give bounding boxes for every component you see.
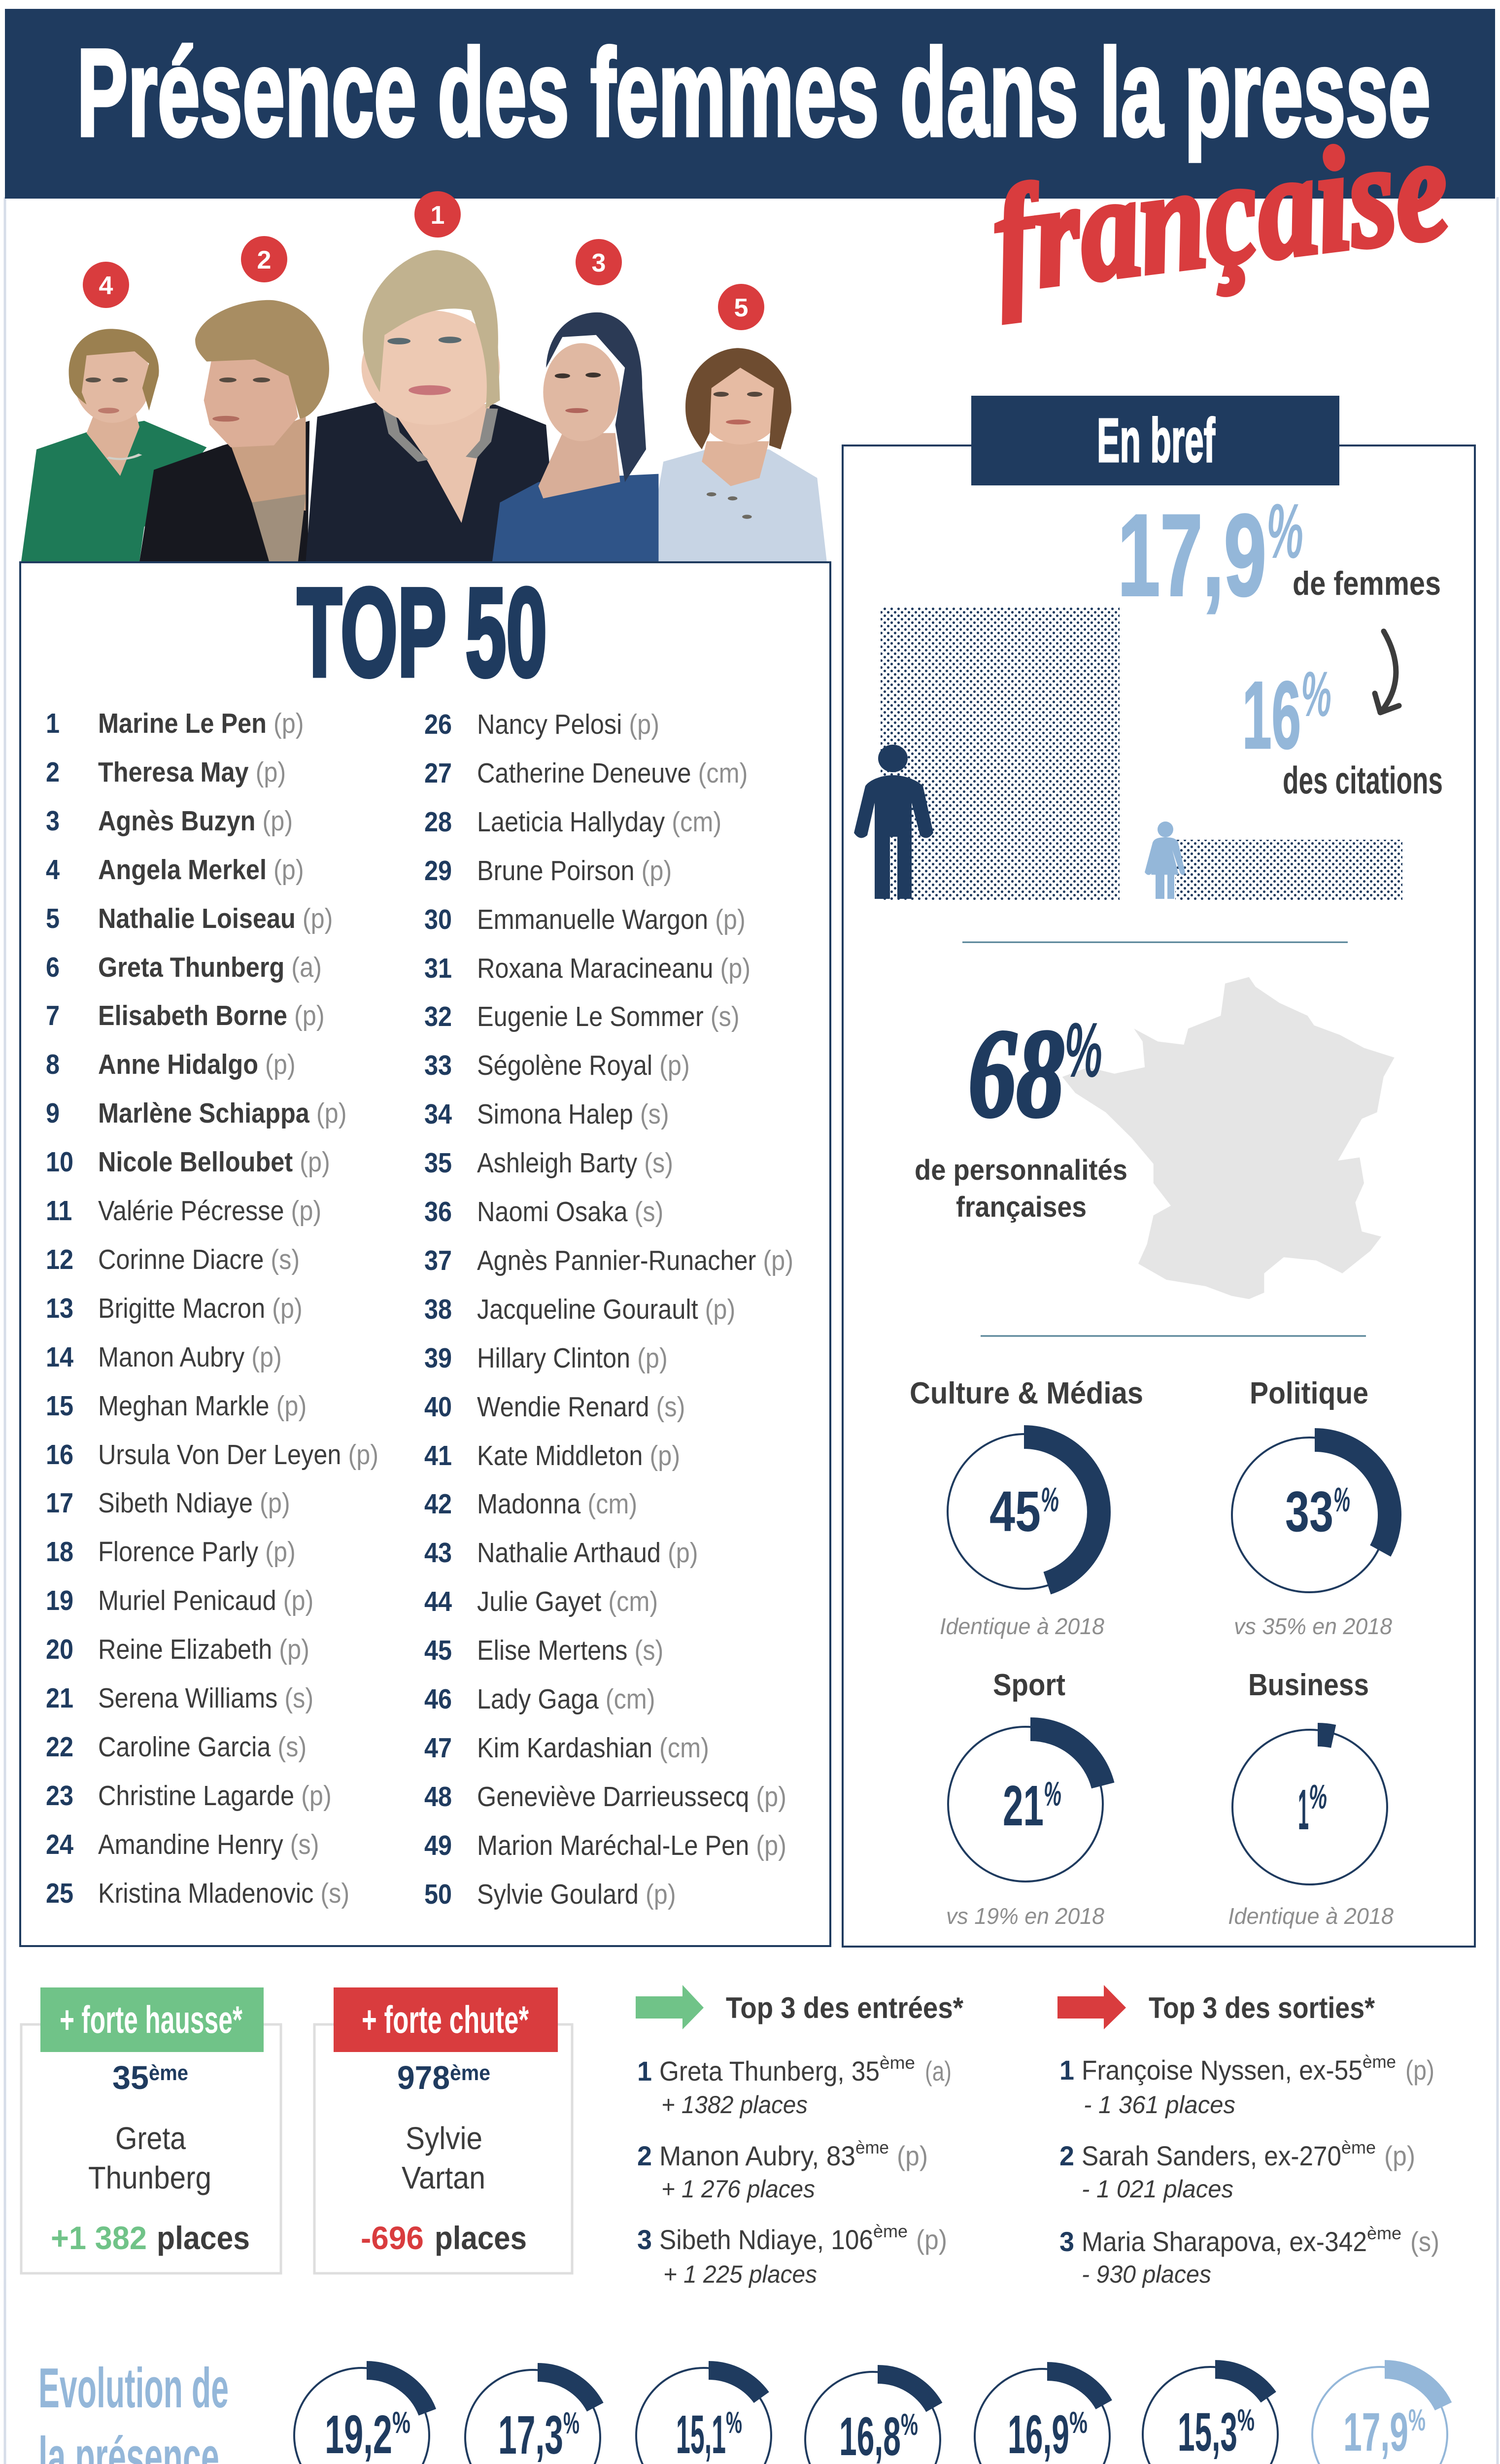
donut: politique 33% — [1232, 1376, 1392, 1639]
donut: sport 21% — [946, 1668, 1105, 1929]
row 24: 24 — [46, 1829, 73, 1860]
row 15: 15 — [46, 1390, 73, 1422]
donut: 2019: % — [1408, 2403, 1426, 2437]
list: top 3 des sorties — [1057, 1985, 1439, 2288]
donut: 2013: 19,2 — [325, 2404, 392, 2464]
stat: 17,9% of women: % — [1266, 488, 1303, 575]
row 35: 35 — [424, 1147, 452, 1179]
row 30: Emmanuelle Wargon (p) — [477, 904, 746, 935]
donut: business 1% — [1228, 1668, 1394, 1929]
row 46: 46 — [424, 1683, 452, 1715]
row 3: Agnès Buzyn (p) — [98, 805, 293, 837]
heading: evolution — [38, 2357, 229, 2464]
row 34: 34 — [424, 1098, 452, 1130]
donut: sport 21%: vs 19% en 2018 — [946, 1903, 1104, 1929]
donut: 2014 — [465, 2370, 603, 2464]
row 21: Serena Williams (s) — [98, 1682, 313, 1714]
row 28: Laeticia Hallyday (cm) — [477, 806, 721, 838]
row 44: Julie Gayet (cm) — [477, 1586, 658, 1617]
card: forte hausse: +1 382 — [51, 2220, 147, 2256]
panel: top 50 — [20, 562, 830, 1946]
card: forte chute: Sylvie — [406, 2121, 482, 2156]
row 27: Catherine Deneuve (cm) — [477, 757, 748, 789]
stat: 16% of quotes: 16 — [1242, 662, 1301, 769]
list: top 3 des sorties: (s) — [1410, 2226, 1439, 2257]
list: top 3 des entrées: 2 — [637, 2140, 652, 2171]
list: top 3 des entrées: + 1382 places — [661, 2091, 808, 2119]
row 32: 32 — [424, 1001, 452, 1032]
donut: 2017: 16,9 — [1008, 2404, 1069, 2464]
list: top 3 des entrées: ème — [873, 2221, 908, 2241]
row 50: 50 — [424, 1879, 452, 1910]
row 7: Elisabeth Borne (p) — [98, 1000, 325, 1031]
list: top 3 des sorties: Maria Sharapova, ex-342 — [1082, 2226, 1367, 2257]
donut: business 1%: Business — [1248, 1668, 1369, 1702]
card: forte chute: 978 — [397, 2059, 450, 2096]
card: forte hausse — [21, 1987, 281, 2273]
row 47: Kim Kardashian (cm) — [477, 1732, 709, 1764]
card: forte hausse: Thunberg — [88, 2160, 211, 2195]
row 49: 49 — [424, 1830, 452, 1861]
arrow: green — [636, 1985, 704, 2029]
donut: culture et médias 45%: 45 — [989, 1479, 1041, 1543]
donut: 2015: % — [726, 2406, 742, 2440]
row 42: Madonna (cm) — [477, 1488, 637, 1520]
row 46: Lady Gaga (cm) — [477, 1683, 655, 1715]
row 17: 17 — [46, 1487, 73, 1519]
row 18: Florence Parly (p) — [98, 1536, 296, 1568]
donut: 2013 — [294, 2368, 432, 2464]
list: top 3 des sorties: Françoise Nyssen, ex-55 — [1082, 2054, 1363, 2086]
list: top 3 des sorties: 1 — [1059, 2054, 1074, 2086]
row 33: Ségolène Royal (p) — [477, 1050, 690, 1081]
card: forte hausse: + forte hausse* — [60, 1998, 242, 2041]
row 37: Agnès Pannier-Runacher (p) — [477, 1245, 793, 1276]
list: top 3 des entrées: ème — [855, 2137, 889, 2157]
donut: culture et médias 45%: % — [1041, 1480, 1059, 1519]
stat: 68% French personalities: 68 — [968, 1004, 1064, 1143]
row 15: Meghan Markle (p) — [98, 1390, 307, 1422]
row 4: Angela Merkel (p) — [98, 854, 304, 886]
donut: culture et médias 45% — [910, 1376, 1143, 1639]
list: top 3 des sorties: ème — [1341, 2137, 1376, 2157]
portraits of the top five — [21, 250, 827, 562]
row 34: Simona Halep (s) — [477, 1098, 669, 1130]
list: top 3 des entrées: Greta Thunberg, 35 — [659, 2055, 880, 2087]
row 41: 41 — [424, 1440, 452, 1472]
card: forte hausse: ème — [149, 2061, 188, 2085]
list: top 3 des sorties: (p) — [1405, 2054, 1434, 2086]
row 29: Brune Poirson (p) — [477, 855, 672, 887]
portrait: Angela Merkel — [21, 329, 206, 562]
stat: 16% of quotes — [1242, 658, 1443, 802]
row 31: Roxana Maracineanu (p) — [477, 953, 750, 984]
rank badge 2 — [241, 236, 287, 282]
row 43: Nathalie Arthaud (p) — [477, 1537, 698, 1569]
donut: 2013: % — [392, 2406, 410, 2440]
row 37: 37 — [424, 1245, 452, 1276]
row 25: 25 — [46, 1878, 73, 1909]
card: forte chute: + forte chute* — [362, 1998, 529, 2041]
row 24: Amandine Henry (s) — [98, 1829, 319, 1860]
row 13: 13 — [46, 1293, 73, 1324]
list: top 3 des entrées: Sibeth Ndiaye, 106 — [659, 2224, 873, 2255]
row 8: Anne Hidalgo (p) — [98, 1049, 296, 1080]
row 23: Christine Lagarde (p) — [98, 1780, 332, 1812]
row 38: 38 — [424, 1294, 452, 1325]
card: forte chute: Vartan — [402, 2160, 485, 2195]
donut: sport 21%: Sport — [993, 1668, 1065, 1702]
row 28: 28 — [424, 806, 452, 838]
donut: culture et médias 45%: Identique à 2018 — [940, 1613, 1104, 1639]
rank badge 4: 4 — [99, 272, 113, 300]
row 23: 23 — [46, 1780, 73, 1812]
donut: business 1%: % — [1309, 1778, 1327, 1816]
list: top 3 des sorties: - 1 021 places — [1082, 2175, 1233, 2203]
stat: 16% of quotes: % — [1301, 658, 1331, 730]
list: top 3 des sorties: - 1 361 places — [1084, 2091, 1235, 2119]
dotted bar: women — [1175, 840, 1402, 900]
donut: culture et médias 45%: Culture & Médias — [910, 1376, 1143, 1410]
row 4: 4 — [46, 854, 60, 886]
rank badge 3: 3 — [592, 249, 606, 277]
row 6: Greta Thunberg (a) — [98, 952, 322, 983]
row 49: Marion Maréchal-Le Pen (p) — [477, 1830, 786, 1861]
stat: 68% French personalities — [915, 1004, 1127, 1223]
list: top 3 des entrées: Manon Aubry, 83 — [659, 2140, 855, 2171]
donut: 2017 — [975, 2369, 1112, 2464]
row 3: 3 — [46, 805, 60, 837]
rank badge 5: 5 — [734, 294, 748, 322]
row 32: Eugenie Le Sommer (s) — [477, 1001, 740, 1032]
list: top 3 des entrées: Top 3 des entrées* — [726, 1991, 964, 2024]
row 35: Ashleigh Barty (s) — [477, 1147, 673, 1179]
list: top 3 des sorties: - 930 places — [1082, 2260, 1211, 2288]
rank badge 5 — [718, 284, 764, 330]
row 11: 11 — [46, 1195, 72, 1227]
arrow: curved down — [1375, 631, 1399, 713]
list: top 3 des entrées — [636, 1985, 964, 2288]
row 22: 22 — [46, 1731, 73, 1763]
donut: 2015 — [636, 2368, 774, 2464]
row 20: 20 — [46, 1634, 73, 1665]
row 11: Valérie Pécresse (p) — [98, 1195, 321, 1227]
list: top 3 des entrées: + 1 276 places — [661, 2175, 815, 2203]
list: top 3 des sorties: (p) — [1384, 2140, 1415, 2171]
row 45: Elise Mertens (s) — [477, 1635, 663, 1666]
row 5: Nathalie Loiseau (p) — [98, 903, 333, 934]
stat: 17,9% of women: de femmes — [1293, 565, 1441, 602]
row 29: 29 — [424, 855, 452, 887]
row 21: 21 — [46, 1682, 73, 1714]
row 18: 18 — [46, 1536, 73, 1568]
rank badge 3 — [576, 239, 622, 285]
list: top 3 des sorties: 3 — [1059, 2226, 1074, 2257]
donut: 2018: % — [1237, 2403, 1255, 2437]
rank badge 1: 1 — [431, 201, 444, 230]
donut: 2014: 17,3 — [498, 2405, 563, 2464]
row 6: 6 — [46, 952, 60, 983]
row 42: 42 — [424, 1488, 452, 1520]
row 26: Nancy Pelosi (p) — [477, 709, 659, 740]
card: forte hausse: places — [157, 2220, 250, 2256]
donut: politique 33%: 33 — [1285, 1479, 1333, 1543]
row 36: 36 — [424, 1196, 452, 1228]
row 13: Brigitte Macron (p) — [98, 1293, 303, 1324]
donut: 2018 — [1143, 2367, 1280, 2464]
row 10: 10 — [46, 1146, 73, 1178]
donut: 2018: 15,3 — [1178, 2402, 1237, 2463]
donut: politique 33%: Politique — [1250, 1376, 1368, 1410]
list: top 3 des entrées: 3 — [637, 2224, 652, 2255]
header banner — [5, 9, 1495, 199]
stat: 68% French personalities: % — [1064, 1007, 1102, 1094]
row 48: Geneviève Darrieussecq (p) — [477, 1781, 786, 1813]
row 12: 12 — [46, 1244, 73, 1275]
rank badge 2: 2 — [257, 246, 271, 274]
row 25: Kristina Mladenovic (s) — [98, 1878, 349, 1909]
heading tab: En bref: En bref — [1097, 406, 1216, 475]
icon: man — [854, 745, 933, 899]
donut: 2017: % — [1069, 2406, 1088, 2440]
row 27: 27 — [424, 757, 452, 789]
stat: 68% French personalities: françaises — [956, 1191, 1087, 1223]
donut: 2016 — [805, 2372, 943, 2464]
dotted bar: men — [881, 608, 1120, 900]
arrow: red — [1057, 1985, 1126, 2029]
row 26: 26 — [424, 709, 452, 740]
list: top 3 des entrées: + 1 225 places — [663, 2260, 817, 2288]
row 22: Caroline Garcia (s) — [98, 1731, 307, 1763]
donut: sport 21%: % — [1044, 1775, 1061, 1813]
portrait: Theresa May — [139, 300, 329, 562]
donut: business 1%: 1 — [1298, 1778, 1309, 1842]
row 20: Reine Elizabeth (p) — [98, 1634, 309, 1665]
list: top 3 des entrées: (p) — [897, 2140, 928, 2171]
list: top 3 des sorties: ème — [1367, 2223, 1401, 2243]
row 47: 47 — [424, 1732, 452, 1764]
row 9: 9 — [46, 1097, 60, 1129]
row 40: 40 — [424, 1391, 452, 1423]
row 45: 45 — [424, 1635, 452, 1666]
row 38: Jacqueline Gourault (p) — [477, 1294, 735, 1325]
card: forte chute: -696 — [361, 2220, 424, 2256]
donut: business 1%: Identique à 2018 — [1228, 1903, 1394, 1929]
row 31: 31 — [424, 953, 452, 984]
card: forte chute — [314, 1987, 572, 2273]
list: top 3 des sorties: Sarah Sanders, ex-270 — [1082, 2140, 1341, 2171]
row 14: 14 — [46, 1341, 73, 1373]
row 14: Manon Aubry (p) — [98, 1341, 282, 1373]
row 19: Muriel Penicaud (p) — [98, 1585, 313, 1616]
donut: politique 33%: % — [1333, 1480, 1350, 1519]
list: top 3 des sorties: ème — [1363, 2052, 1396, 2072]
row 50: Sylvie Goulard (p) — [477, 1879, 676, 1910]
icon: woman — [1145, 821, 1185, 899]
list: top 3 des entrées: (p) — [916, 2224, 947, 2255]
list: top 3 des entrées: (a) — [925, 2055, 952, 2087]
row 48: 48 — [424, 1781, 452, 1813]
row 5: 5 — [46, 903, 60, 934]
row 41: Kate Middleton (p) — [477, 1440, 680, 1472]
card: forte chute: places — [435, 2220, 527, 2256]
list: top 3 des sorties: Top 3 des sorties* — [1149, 1991, 1375, 2024]
row 40: Wendie Renard (s) — [477, 1391, 685, 1423]
row 12: Corinne Diacre (s) — [98, 1244, 300, 1275]
row 10: Nicole Belloubet (p) — [98, 1146, 330, 1178]
heading tab: En bref — [971, 396, 1339, 485]
row 16: Ursula Von Der Leyen (p) — [98, 1439, 378, 1471]
stat: 68% French personalities: de personnalités — [915, 1154, 1127, 1186]
row 36: Naomi Osaka (s) — [477, 1196, 663, 1228]
portrait: Marine Le Pen — [306, 250, 550, 562]
heading: TOP 50: TOP 50 — [297, 562, 547, 703]
map: France — [1062, 977, 1395, 1299]
donut: 2019: 17,9 — [1343, 2402, 1408, 2463]
donut: sport 21%: 21 — [1003, 1774, 1044, 1838]
portrait: Nathalie Loiseau — [646, 348, 827, 562]
rank badge 1 — [414, 191, 461, 238]
donut: 2019 — [1312, 2367, 1450, 2464]
donut: 2015: 15,1 — [676, 2404, 726, 2464]
row 16: 16 — [46, 1439, 73, 1471]
row 19: 19 — [46, 1585, 73, 1616]
panel: en bref — [843, 396, 1475, 1947]
row 1: Marine Le Pen (p) — [98, 708, 304, 739]
list: top 3 des entrées: 1 — [637, 2055, 652, 2087]
row 44: 44 — [424, 1586, 452, 1617]
row 9: Marlène Schiappa (p) — [98, 1097, 347, 1129]
donut: 2014: % — [563, 2406, 580, 2440]
row 30: 30 — [424, 904, 452, 935]
donut: politique 33%: vs 35% en 2018 — [1234, 1613, 1392, 1639]
list: top 3 des sorties: 2 — [1059, 2140, 1074, 2171]
row 43: 43 — [424, 1537, 452, 1569]
card: forte chute: ème — [450, 2061, 490, 2085]
heading: evolution: Evolution de — [38, 2357, 229, 2420]
row 7: 7 — [46, 1000, 60, 1031]
row 17: Sibeth Ndiaye (p) — [98, 1487, 290, 1519]
donut: 2016: % — [901, 2408, 918, 2442]
row 33: 33 — [424, 1050, 452, 1081]
row 2: 2 — [46, 756, 60, 788]
rank badge 4 — [83, 262, 129, 308]
row 39: Hillary Clinton (p) — [477, 1342, 668, 1374]
list: top 3 des entrées: ème — [880, 2053, 915, 2073]
row 1: 1 — [46, 708, 60, 739]
portrait: Agnès Buzyn — [492, 312, 658, 562]
row 8: 8 — [46, 1049, 60, 1080]
row 2: Theresa May (p) — [98, 756, 286, 788]
card: forte hausse: 35 — [112, 2059, 149, 2096]
stat: 17,9% of women: 17,9 — [1118, 490, 1266, 620]
row 39: 39 — [424, 1342, 452, 1374]
card: forte hausse: Greta — [115, 2121, 186, 2156]
stat: 17,9% of women — [1118, 488, 1441, 620]
